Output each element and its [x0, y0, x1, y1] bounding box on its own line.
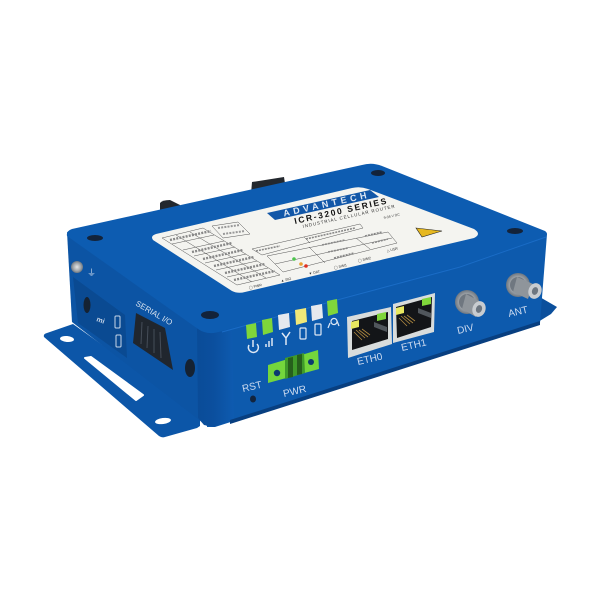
antenna connector: DIV [455, 290, 488, 319]
port labels [241, 305, 529, 400]
port labels: ANT [507, 305, 529, 320]
front lower edge [230, 321, 540, 424]
port labels: PWR [282, 384, 307, 400]
ground screw [71, 261, 83, 273]
port: ETH1 [393, 293, 435, 343]
LED icons [248, 318, 339, 352]
port: ETH0 [347, 307, 392, 358]
port labels: ETH1 [400, 337, 428, 354]
front face [207, 234, 547, 427]
indicator legend: ◯ SIM2 [357, 255, 371, 263]
indicator legend: ◯ SIM1 [333, 262, 347, 270]
top face [67, 164, 547, 333]
SIM icons [115, 316, 120, 328]
side screws [84, 297, 90, 313]
status LEDs [246, 299, 338, 339]
top screw holes [87, 170, 523, 319]
left side face: SERIAL I/O [134, 299, 174, 327]
left side face: ⏚ [87, 268, 96, 278]
reset pinhole [250, 396, 256, 402]
left side face [67, 232, 214, 427]
indicator legend: ▼ DAT [308, 269, 321, 276]
left table [162, 222, 280, 285]
port labels: ETH0 [356, 351, 384, 368]
rounded front corner [197, 325, 234, 427]
rear DIN clips [160, 177, 286, 212]
indicator legend: ▲ SIG [280, 277, 292, 283]
serial connector [133, 313, 173, 370]
power connector [268, 350, 319, 383]
mounting flange [44, 296, 557, 437]
subtitle: INDUSTRIAL CELLULAR ROUTER [302, 204, 396, 229]
supply rating: 9-36 V DC [383, 212, 401, 220]
brand banner: ADVANTECH [282, 190, 367, 218]
port labels: DIV [456, 322, 475, 337]
indicator legend: ◯ PWR [248, 282, 263, 290]
product label [152, 187, 478, 293]
right table [252, 224, 397, 272]
left side face: mi [95, 316, 105, 326]
warning icon [416, 228, 442, 237]
antenna connector: ANT [506, 273, 544, 301]
indicator legend [248, 247, 399, 290]
indicator legend: △ USR [386, 247, 399, 253]
front top edge highlight [222, 237, 546, 332]
port labels: RST [241, 380, 263, 395]
series title: ICR-3200 SERIES [293, 196, 388, 226]
